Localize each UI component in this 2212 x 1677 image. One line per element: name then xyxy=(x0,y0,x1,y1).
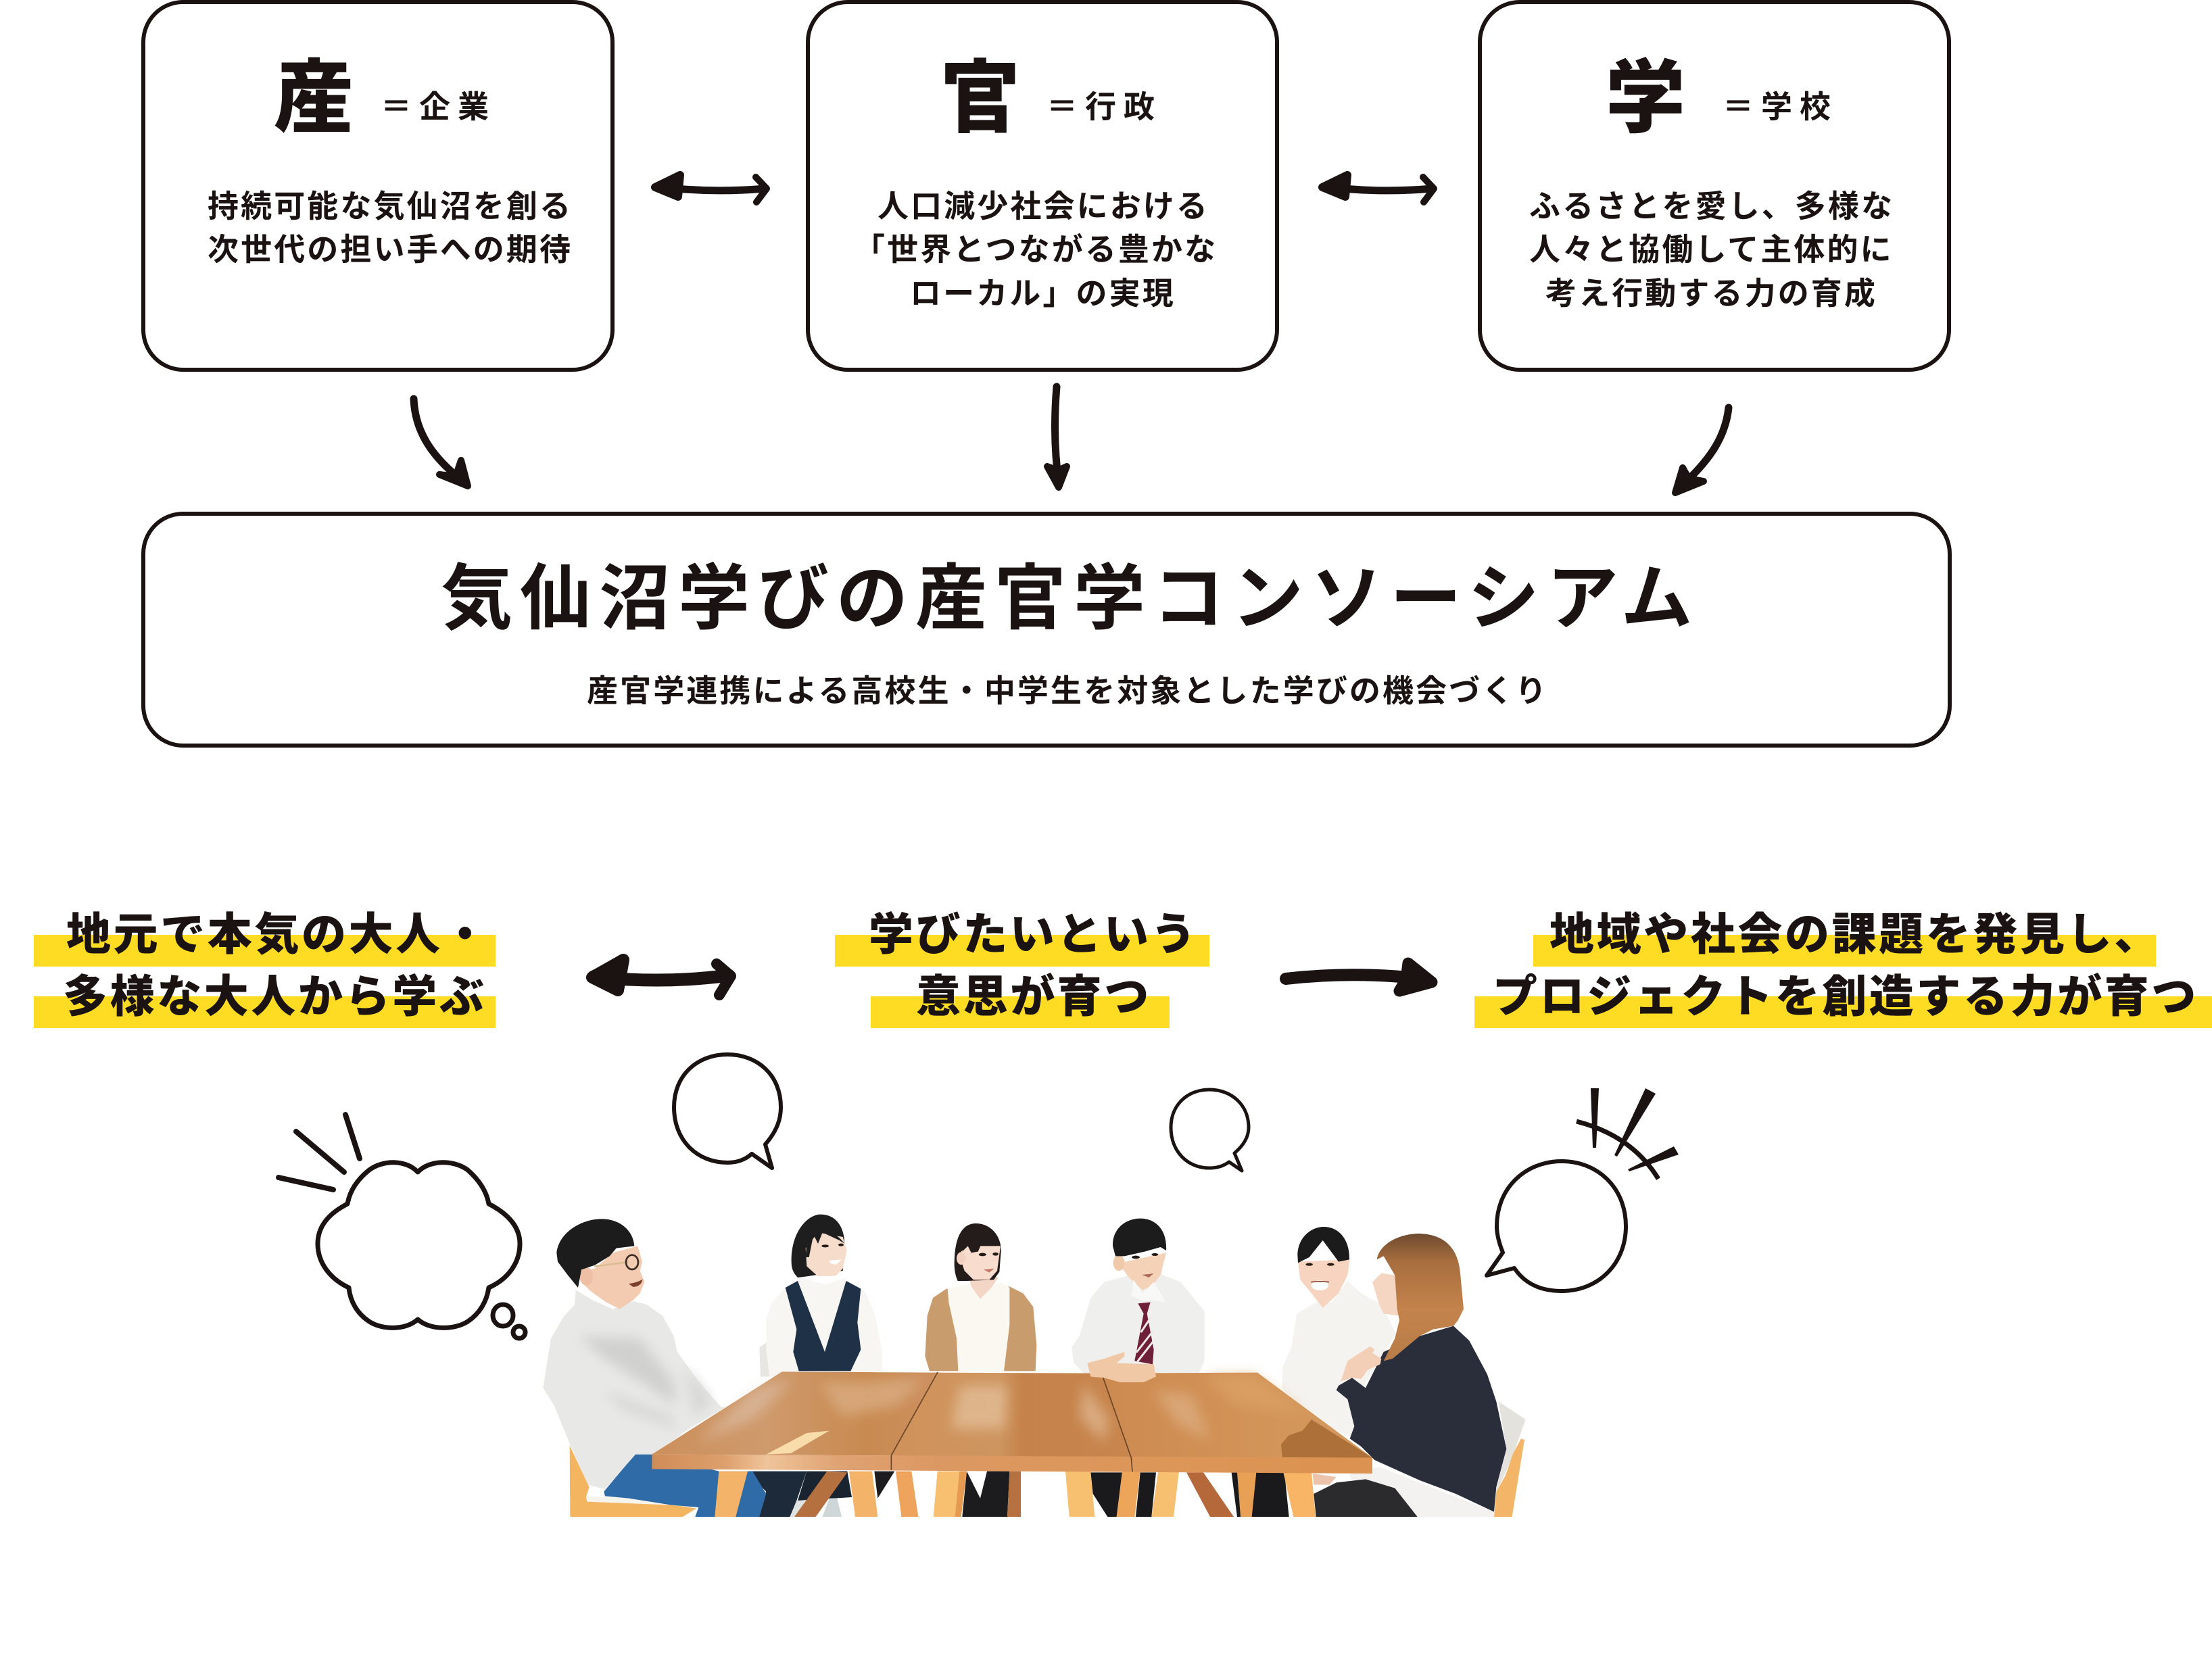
heading line 1: 地元で本気の大人・ xyxy=(66,909,489,959)
icon: speech bubble 1 xyxy=(674,1054,781,1168)
heading group: will to learn xyxy=(835,909,1209,1028)
text: line 2: 次世代の担い手への期待 xyxy=(208,232,573,267)
chair: right xyxy=(1494,1401,1526,1517)
panel: 学 school xyxy=(1478,0,1951,372)
text: line 3: ローカル」の実現 xyxy=(910,276,1176,311)
text: line 1: ふるさとを愛し、多様な xyxy=(1529,189,1894,224)
heading line 1: 地域や社会の課題を発見し、 xyxy=(1549,909,2161,959)
subtitle: 産官学連携による高校生・中学生を対象とした学びの機会づくり xyxy=(587,673,1549,708)
text: line 1: 持続可能な気仙沼を創る xyxy=(208,189,573,224)
arrow: 産 to 官 xyxy=(655,175,767,202)
person: girl with tan cardigan xyxy=(925,1223,1036,1371)
table top xyxy=(652,1371,1372,1474)
heading line 2: 意思が育つ xyxy=(916,971,1151,1021)
text: line 2: 人々と協働して主体的に xyxy=(1529,232,1894,267)
heading line 2: 多様な大人から学ぶ xyxy=(63,971,486,1021)
person: man with glasses xyxy=(543,1219,725,1489)
panel: 産 company xyxy=(141,0,615,372)
person: boy with striped tie xyxy=(1072,1219,1205,1379)
heading line 2: プロジェクトを創造する力が育つ xyxy=(1493,971,2198,1021)
person: woman with brown hair and dark sweater xyxy=(1313,1234,1506,1517)
heading: 学: 学 xyxy=(1606,54,1685,143)
label: = 学校: ＝学校 xyxy=(1723,89,1838,124)
arrow: 官 to 学 xyxy=(1322,175,1434,202)
person: smiling girl in white xyxy=(1282,1227,1396,1438)
arrow: 学 down to consortium xyxy=(1675,408,1729,493)
arrow: 産 down to consortium xyxy=(414,399,468,486)
arrow: two-way lower xyxy=(592,960,731,995)
heading: 産: 産 xyxy=(274,54,354,143)
lower bodies xyxy=(604,1455,1289,1517)
icon: speech bubble 3 xyxy=(1487,1161,1626,1291)
chair: behind vest girl xyxy=(759,1343,769,1377)
photo: six people around a wooden table xyxy=(543,1215,1526,1517)
text: line 3: 考え行動する力の育成 xyxy=(1545,276,1877,311)
panel: 官 government xyxy=(806,0,1279,372)
chair: left xyxy=(570,1445,696,1517)
panel: consortium xyxy=(141,512,1952,748)
icon: speech bubble 2 xyxy=(1171,1090,1249,1171)
table legs xyxy=(715,1472,1316,1517)
heading: 官: 官 xyxy=(940,54,1020,143)
heading line 1: 学びたいという xyxy=(869,909,1198,959)
hands of boy on table xyxy=(1087,1352,1156,1382)
icon: surprise spikes xyxy=(1577,1088,1679,1179)
text: line 1: 人口減少社会における xyxy=(877,189,1209,224)
text: line 2: 「世界とつながる豊かな xyxy=(854,232,1218,267)
heading group: learn from adults xyxy=(34,909,496,1028)
arrow: 官 down to consortium xyxy=(1047,387,1067,487)
heading group: discover issues xyxy=(1474,909,2212,1028)
label: = 行政: ＝行政 xyxy=(1047,89,1162,124)
label: = 企業: ＝企業 xyxy=(381,89,496,124)
title: consortium name: 気仙沼学びの産官学コンソーシアム xyxy=(441,559,1700,639)
icon: thought cloud with sparks xyxy=(279,1115,525,1338)
person: girl with navy vest xyxy=(766,1215,882,1377)
arrow: right lower xyxy=(1286,963,1432,991)
